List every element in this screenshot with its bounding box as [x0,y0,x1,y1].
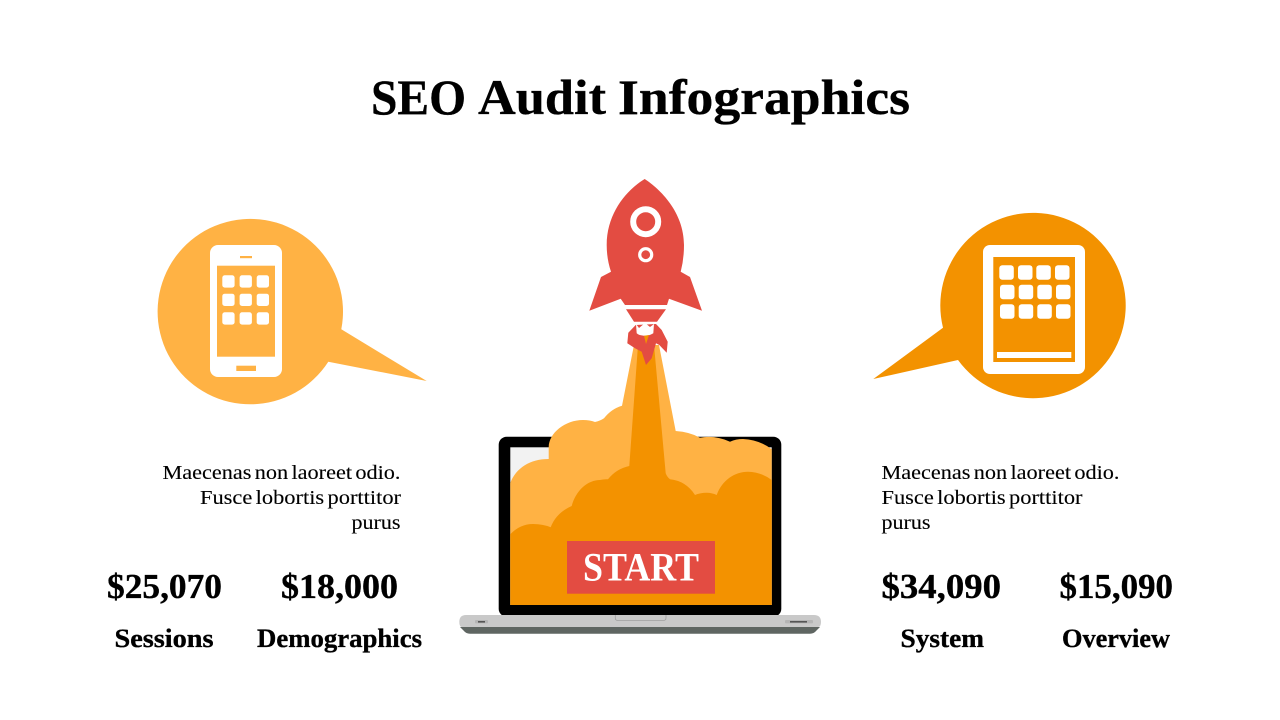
left description text: purus [352,512,401,534]
right description text: Maecenas non laoreet odio. [882,462,1120,484]
icon: smartphone [210,245,282,377]
stat: demographics [257,567,422,653]
rocket lower nozzle [626,309,666,322]
rocket large window [633,209,658,234]
laptop screen [510,447,772,605]
rocket [589,179,702,365]
laptop base [459,615,821,634]
left description text [162,462,401,534]
title: Infographics [618,69,910,125]
stat: demographics: Demographics [257,624,422,653]
laptop lid [499,437,781,617]
laptop with launch smoke [459,345,821,634]
stat: sessions: $25,070 [107,567,222,606]
stat: system: $34,090 [882,567,1001,606]
right description text: Fusce lobortis porttitor [882,487,1083,509]
left description text: Maecenas non laoreet odio. [162,462,400,484]
stat: demographics: $18,000 [281,567,398,606]
dark smoke cloud and beam [510,345,772,605]
bubble: left [158,219,427,404]
right description text: purus [882,512,931,534]
right description text [882,462,1120,534]
light smoke cloud and beam [510,345,772,605]
stat: overview [1060,567,1173,653]
stat: system: System [900,624,984,653]
stat: system [882,567,1001,653]
rocket small window [640,249,652,261]
title: SEO [371,69,466,125]
title [371,69,910,125]
stat: sessions [107,567,222,653]
stat: overview: Overview [1062,624,1170,653]
rocket flame [627,323,668,365]
stat: overview: $15,090 [1060,567,1173,606]
title: Audit [478,69,606,125]
rocket body and fins [589,179,702,311]
bubble: right [873,213,1126,398]
start button: START [583,544,699,590]
right speech bubble with tablet icon [873,213,1126,398]
icon: tablet [983,245,1085,374]
stat: sessions: Sessions [114,624,214,653]
left description text: Fusce lobortis porttitor [200,487,401,509]
left speech bubble with phone icon [158,219,427,404]
